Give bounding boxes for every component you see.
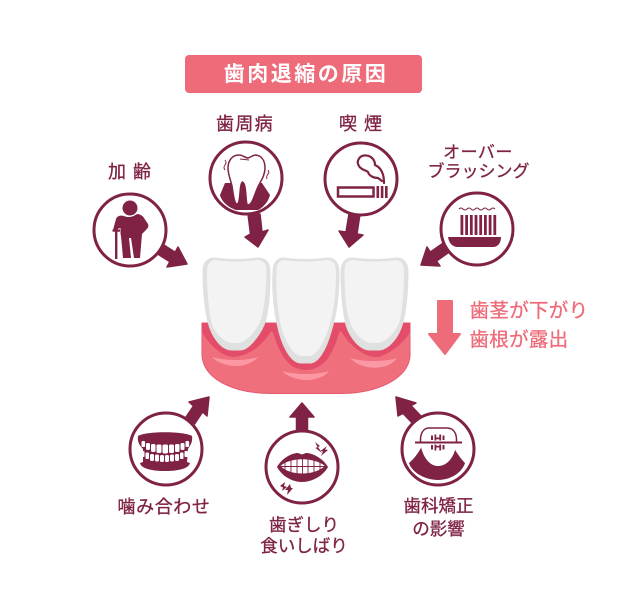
cause: periodontal disease: 歯周病 xyxy=(216,114,274,134)
cause: bite misalignment: 噛み合わせ xyxy=(118,497,210,517)
result text: 歯茎が下がり xyxy=(470,300,588,322)
cause: teeth grinding and clenching: 歯ぎしり xyxy=(269,515,339,535)
arrow: periodontal disease to teeth xyxy=(245,214,268,247)
cause: aging xyxy=(94,162,187,267)
icon: tooth with braces xyxy=(409,428,465,480)
cause: periodontal disease xyxy=(210,114,282,247)
arrow: orthodontics to teeth xyxy=(396,397,422,424)
teeth and gum illustration xyxy=(202,258,410,394)
cause: aging: 加 齢 xyxy=(108,162,152,182)
arrow: grinding to teeth xyxy=(290,403,314,431)
tooth center xyxy=(273,258,339,363)
gum xyxy=(202,323,410,394)
arrow: over-brushing to teeth xyxy=(421,242,450,266)
cause: over-brushing: ブラッシング xyxy=(428,161,530,181)
cause: smoking xyxy=(325,114,397,247)
tooth left xyxy=(203,258,270,350)
result text xyxy=(469,300,588,351)
dark gum margin xyxy=(202,323,410,370)
icon: cigarette and smoke xyxy=(338,155,388,198)
cause: over-brushing xyxy=(421,143,530,266)
cause: orthodontic treatment: の影響 xyxy=(412,519,465,539)
cause: orthodontic treatment: 歯科矯正 xyxy=(404,496,474,516)
arrow: bite to teeth xyxy=(185,397,209,424)
cause: teeth grinding and clenching: 食いしばり xyxy=(260,536,348,556)
icon: clenched mouth xyxy=(277,442,328,495)
tooth right xyxy=(341,258,408,350)
arrow: aging to teeth xyxy=(157,244,187,267)
cause: smoking: 喫 煙 xyxy=(339,114,383,134)
title banner xyxy=(185,55,422,93)
icon: elderly person with cane xyxy=(112,200,148,259)
gum highlights xyxy=(212,357,397,380)
icon: toothbrush xyxy=(448,208,501,247)
icon: dentures xyxy=(138,432,192,471)
arrow: smoking to teeth xyxy=(339,214,363,247)
cause: over-brushing: オーバー xyxy=(443,143,513,162)
icon: tooth with receding gum xyxy=(220,155,270,210)
result text: 歯根が露出 xyxy=(469,329,569,351)
result arrow xyxy=(429,301,460,354)
icon: pain sparks xyxy=(280,442,328,495)
title banner: 歯肉退縮の原因 xyxy=(224,63,388,86)
cause: teeth grinding and clenching xyxy=(260,403,348,556)
cause: bite misalignment xyxy=(118,397,210,517)
cause: orthodontic treatment xyxy=(396,397,474,539)
